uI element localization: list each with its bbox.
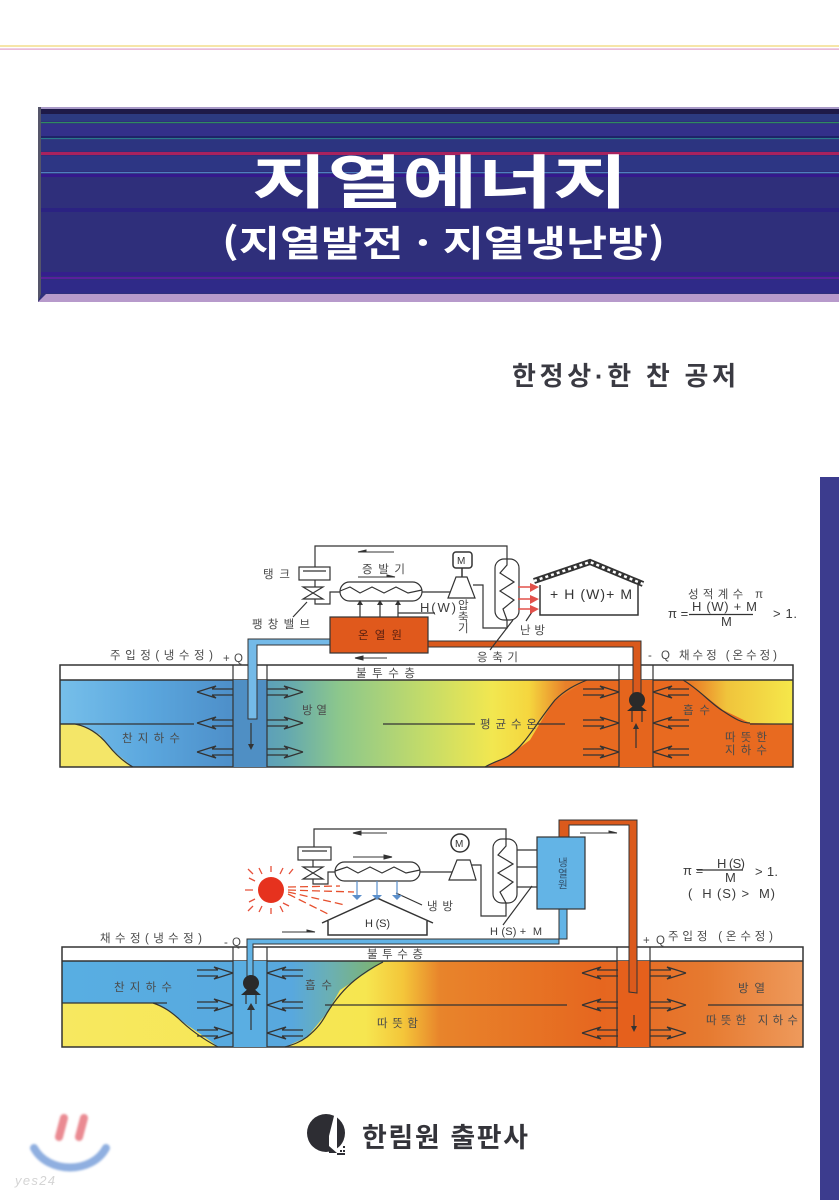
- labels: 따뜻한: [725, 731, 767, 744]
- cold source box: 열: [558, 868, 568, 880]
- right spine bar: [820, 477, 839, 1200]
- labels: - Q 채수정 (온수정): [648, 649, 777, 662]
- labels: 불투수층: [356, 667, 415, 680]
- labels: 찬지하수: [114, 980, 172, 994]
- formula: coefficient of performance: π =: [668, 606, 688, 621]
- formula: cooling performance: π =: [683, 863, 703, 878]
- ground layers with temperature gradient: [60, 665, 793, 767]
- cooled house: [322, 881, 433, 935]
- extraction well and pump: [197, 909, 567, 1047]
- heat pump circuit: M: [457, 556, 465, 567]
- heated house: [518, 562, 643, 615]
- labels: 찬지하수: [122, 731, 180, 745]
- heat source box: 온열원: [358, 628, 402, 642]
- formula: cooling performance: [683, 856, 778, 901]
- labels: H (S) + M: [490, 926, 542, 938]
- icon: sun with radiation: [245, 866, 354, 915]
- heat pump circuit: M: [455, 839, 463, 850]
- heat source box: [330, 617, 428, 653]
- labels: 채수정(냉수정): [100, 932, 202, 945]
- heated house: + H (W)+ M: [550, 586, 632, 602]
- labels: 방열: [738, 982, 765, 995]
- ground layers with temperature gradient: [62, 947, 803, 1047]
- cold source box: 냉: [558, 857, 568, 869]
- labels: 축: [458, 611, 469, 624]
- labels: 기: [458, 622, 469, 635]
- panel: cooling diagram: [62, 820, 803, 1047]
- formula: cooling performance: H (S): [717, 856, 745, 871]
- formula: coefficient of performance: M: [721, 614, 732, 629]
- formula: cooling performance: > 1.: [755, 864, 778, 879]
- formula: cooling performance: ( H (S) > M): [688, 886, 775, 901]
- subtitle: (지열발전 · 지열냉난방): [222, 215, 665, 267]
- extraction well and pump: [428, 641, 689, 767]
- labels: H(W): [420, 600, 456, 615]
- heat pump circuit: [282, 829, 537, 932]
- labels: 흡수: [683, 703, 710, 717]
- formula: coefficient of performance: > 1.: [773, 606, 797, 621]
- labels: 난방: [520, 624, 545, 637]
- panel: heating diagram: [60, 546, 797, 767]
- cooled house: H (S): [365, 918, 390, 930]
- authors: 한정상·한 찬 공저: [512, 361, 736, 391]
- labels: - Q: [224, 937, 241, 949]
- heat pump circuit: [293, 546, 532, 660]
- watermark: smile logo: yes24: [14, 1173, 55, 1188]
- labels: 압: [458, 599, 469, 612]
- labels: + Q: [223, 653, 243, 665]
- publisher name: 한림원 출판사: [362, 1123, 528, 1153]
- formula: cooling performance: M: [725, 870, 736, 885]
- labels: [110, 563, 777, 757]
- formula: coefficient of performance: H (W) + M: [692, 599, 757, 614]
- publisher logo: [307, 1114, 345, 1155]
- labels: 평균수온: [480, 718, 537, 731]
- cold source box: 원: [558, 879, 568, 891]
- labels: 냉방: [427, 900, 453, 913]
- labels: 불투수층: [367, 948, 423, 961]
- formula: coefficient of performance: [668, 588, 797, 629]
- labels: 팽창밸브: [252, 618, 310, 631]
- labels: 지하수: [725, 743, 767, 757]
- cold source box: [537, 837, 585, 909]
- labels: 주입정 (온수정): [668, 930, 773, 943]
- labels: + Q: [643, 935, 665, 947]
- labels: 흡수: [305, 978, 332, 992]
- injection well: [559, 820, 686, 1047]
- labels: 탱크: [263, 568, 290, 581]
- labels: 응축기: [477, 651, 518, 664]
- panel: title banner: [38, 107, 839, 302]
- labels: 따뜻함: [377, 1017, 418, 1030]
- labels: 증발기: [362, 563, 405, 576]
- labels: 방열: [302, 704, 327, 717]
- title: 지열에너지: [252, 136, 628, 220]
- labels: [100, 900, 798, 1030]
- top printed hairlines: [0, 45, 839, 50]
- injection well: [197, 639, 330, 767]
- labels: 따뜻한 지하수: [706, 1013, 798, 1027]
- labels: 주입정(냉수정): [110, 649, 213, 662]
- formula: coefficient of performance: 성적계수 π: [688, 588, 763, 601]
- watermark: smile logo: [14, 1118, 106, 1188]
